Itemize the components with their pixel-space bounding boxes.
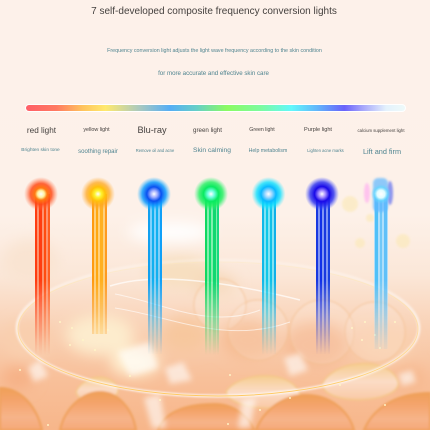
glow: red — [24, 177, 58, 211]
benefit: brighten skin tone: Brighten skin tone — [21, 148, 60, 153]
beam: indigo — [316, 194, 330, 354]
label: calcium supplement light: calcium supplement light — [357, 128, 405, 133]
light names row — [27, 125, 405, 135]
beam: calcium light — [374, 194, 388, 349]
benefit: remove oil and acne: Remove oil and acne — [136, 148, 174, 153]
label: yellow light: yellow light — [83, 127, 110, 133]
label: green light: green light — [193, 127, 222, 134]
benefit: skin calming: Skin calming — [193, 147, 231, 154]
benefit: help metabolism: Help metabolism — [249, 148, 287, 154]
glow: indigo — [305, 177, 339, 211]
label: red light: red light — [27, 126, 56, 135]
beam: green — [205, 194, 219, 359]
lower orange bubbles, cut at the frame edges — [0, 388, 430, 430]
glow: green — [194, 177, 228, 211]
light beams and glows — [24, 176, 394, 352]
glow: yellow — [81, 177, 115, 211]
beam: blue — [148, 194, 162, 354]
soft colour areas — [2, 222, 424, 390]
benefits row — [21, 147, 401, 156]
glow: blue — [137, 177, 171, 211]
glow: cyan — [252, 177, 286, 211]
label: Purple light: Purple light — [304, 127, 332, 133]
sparkles — [19, 321, 396, 426]
middle bubbles — [76, 363, 398, 408]
title: 7 self-developed composite frequency conversion lights — [91, 6, 337, 17]
subtitle line 1: Frequency conversion light adjusts the light wave frequency according to the skin condition — [107, 48, 322, 54]
benefit: lift and firm: Lift and firm — [363, 147, 401, 156]
light ring — [17, 260, 419, 396]
translucent upper spheres — [194, 279, 405, 364]
soft white highlights — [28, 342, 416, 428]
molecules top right — [342, 196, 410, 248]
subtitle line 2: for more accurate and effective skin care — [158, 70, 269, 77]
benefit: lighten acne marks: Lighten acne marks — [307, 148, 344, 153]
beam: yellow — [92, 194, 107, 334]
label: Green light: Green light — [249, 127, 275, 133]
beam: red — [35, 194, 50, 355]
beam: cyan — [262, 194, 276, 354]
label: Blu-ray: Blu-ray — [137, 125, 167, 135]
benefit: soothing repair: soothing repair — [78, 148, 118, 154]
glow: calcium light — [364, 178, 393, 212]
